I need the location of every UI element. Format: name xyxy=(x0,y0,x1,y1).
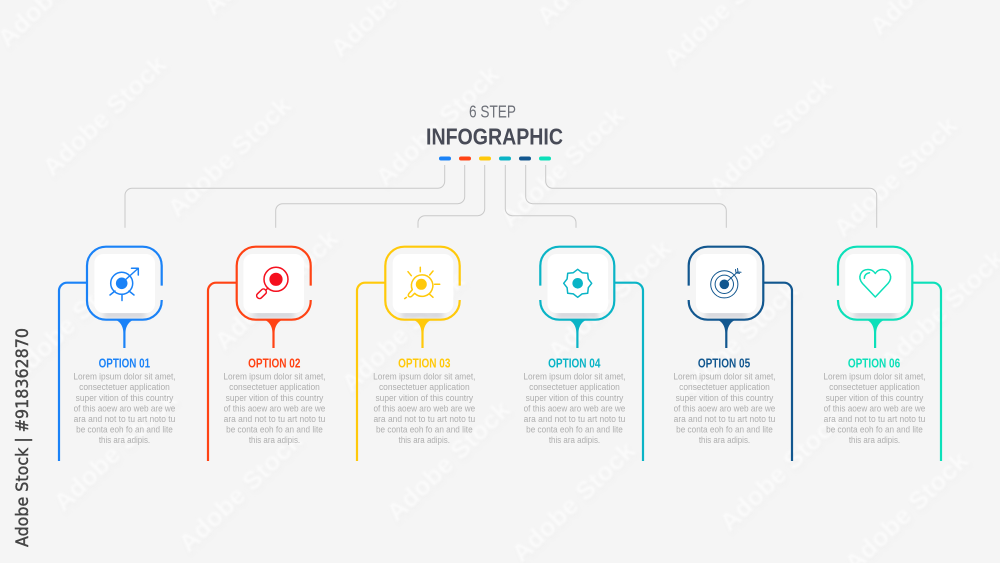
watermark pattern: Adobe Stock xyxy=(338,270,473,401)
watermark pattern: Adobe Stock xyxy=(37,51,172,182)
icon card xyxy=(94,254,155,313)
body text: of this aoew aro web are we xyxy=(373,403,475,413)
stem xyxy=(868,320,883,348)
title: infographic: INFOGRAPHIC xyxy=(426,123,563,149)
body text: be conta eoh fo an and lite xyxy=(226,424,323,434)
body text: consectetuer application xyxy=(229,382,320,392)
option title: OPTION 05 xyxy=(698,355,750,370)
box frame xyxy=(385,247,460,320)
box frame xyxy=(540,247,614,320)
watermark pattern: Adobe Stock xyxy=(3,257,138,388)
body text: ara and not to tu art noto tu xyxy=(224,414,325,424)
card shadow xyxy=(556,312,599,318)
icon: target arrow xyxy=(110,268,138,300)
icon card xyxy=(548,254,608,313)
option title: OPTION 04 xyxy=(548,355,601,370)
stem xyxy=(415,320,430,348)
body text: super vition of this country xyxy=(226,393,324,403)
body text: ara and not to tu art noto tu xyxy=(74,414,175,424)
body text: super vition of this country xyxy=(76,393,174,403)
box frame xyxy=(689,247,763,320)
body text: this ara adipis. xyxy=(849,435,900,445)
body text xyxy=(373,372,475,445)
body text: Lorem ipsum dolor sit amet, xyxy=(673,372,776,382)
panel: option 05 xyxy=(673,247,792,461)
body text: be conta eoh fo an and lite xyxy=(526,424,623,434)
body text: consectetuer application xyxy=(379,382,470,392)
icon card xyxy=(393,254,453,313)
watermark pattern: Adobe Stock xyxy=(714,406,849,537)
stem xyxy=(117,320,132,348)
body text: of this aoew aro web are we xyxy=(524,403,625,413)
title block xyxy=(426,101,563,149)
watermark pattern: Adobe Stock xyxy=(497,105,632,236)
panel: option 03 xyxy=(357,247,475,461)
body text xyxy=(223,372,326,445)
watermark pattern: Adobe Stock xyxy=(173,427,308,558)
watermark pattern: Adobe Stock xyxy=(703,71,838,202)
body text: this ara adipis. xyxy=(99,435,150,445)
box frame xyxy=(87,247,162,320)
body text: of this aoew aro web are we xyxy=(824,403,925,413)
icon: bullseye xyxy=(711,268,741,298)
card shadow xyxy=(401,312,444,318)
box frame xyxy=(237,247,311,320)
body text: consectetuer application xyxy=(79,382,170,392)
watermark pattern: Adobe Stock xyxy=(716,409,851,540)
icon: light bulb xyxy=(405,267,440,299)
watermark pattern: Adobe Stock xyxy=(50,389,185,520)
side line xyxy=(912,283,941,461)
body text: super vition of this country xyxy=(676,393,774,403)
body text: of this aoew aro web are we xyxy=(74,403,175,413)
body text: be conta eoh fo an and lite xyxy=(376,424,473,434)
watermark pattern: Adobe Stock xyxy=(370,61,505,192)
panel: option 06 xyxy=(823,247,941,461)
box frame xyxy=(838,247,912,320)
watermark pattern: Adobe Stock xyxy=(39,54,174,185)
watermark pattern: Adobe Stock xyxy=(381,396,516,527)
panel: option 04 xyxy=(523,247,643,461)
body text: super vition of this country xyxy=(375,393,474,403)
watermark pattern: Adobe Stock xyxy=(383,399,518,530)
connector lines xyxy=(125,165,877,228)
stem xyxy=(719,320,734,348)
body text: ara and not to tu art noto tu xyxy=(674,414,775,424)
watermark pattern: Adobe Stock xyxy=(5,260,140,391)
watermark pattern: Adobe Stock xyxy=(175,430,310,561)
watermark pattern: Adobe Stock xyxy=(211,228,346,359)
body text: of this aoew aro web are we xyxy=(674,403,775,413)
side line xyxy=(614,283,643,461)
body text: Lorem ipsum dolor sit amet, xyxy=(373,372,475,382)
body text: this ara adipis. xyxy=(399,435,450,445)
watermark pattern: Adobe Stock xyxy=(162,92,297,223)
card shadow xyxy=(103,312,146,318)
watermark pattern: Adobe Stock xyxy=(48,386,183,517)
option title: OPTION 06 xyxy=(848,355,900,370)
body text: ara and not to tu art noto tu xyxy=(524,414,625,424)
body text: be conta eoh fo an and lite xyxy=(826,424,923,434)
watermark pattern: Adobe Stock xyxy=(544,238,679,369)
body text: this ara adipis. xyxy=(249,435,300,445)
watermark pattern: Adobe Stock xyxy=(164,95,299,226)
body text: super vition of this country xyxy=(526,393,624,403)
watermark pattern: Adobe Stock xyxy=(336,267,471,398)
watermark pattern: Adobe Stock xyxy=(830,115,965,246)
body text: of this aoew aro web are we xyxy=(224,403,325,413)
body text: this ara adipis. xyxy=(549,435,600,445)
body text: consectetuer application xyxy=(679,382,770,392)
stem xyxy=(570,320,585,348)
body text: be conta eoh fo an and lite xyxy=(676,424,773,434)
side line xyxy=(763,283,792,461)
body text: ara and not to tu art noto tu xyxy=(824,414,925,424)
body text xyxy=(73,372,176,445)
watermark pattern: Adobe Stock xyxy=(705,74,840,205)
body text: this ara adipis. xyxy=(699,435,750,445)
body text xyxy=(523,372,626,445)
icon card xyxy=(696,254,757,313)
body text: be conta eoh fo an and lite xyxy=(76,424,173,434)
body text xyxy=(823,372,926,445)
option title: OPTION 01 xyxy=(99,355,150,370)
title: 6 step: 6 STEP xyxy=(469,101,516,121)
card shadow xyxy=(854,312,896,318)
watermark pattern: Adobe Stock xyxy=(372,64,507,195)
icon card xyxy=(243,254,304,313)
icon card xyxy=(845,254,906,313)
icon: badge gear xyxy=(564,269,592,297)
option title: OPTION 02 xyxy=(248,355,300,370)
body text: ara and not to tu art noto tu xyxy=(373,414,475,424)
side line xyxy=(357,283,385,461)
body text: Lorem ipsum dolor sit amet, xyxy=(823,372,926,382)
body text: Lorem ipsum dolor sit amet, xyxy=(223,372,326,382)
stock credit label: Adobe Stock | #918362870 xyxy=(13,328,33,547)
icon: magnifier xyxy=(256,267,288,300)
icon: heart xyxy=(860,270,891,297)
body text: super vition of this country xyxy=(826,393,924,403)
stem xyxy=(266,320,281,348)
body text: consectetuer application xyxy=(829,382,920,392)
watermark pattern: Adobe Stock xyxy=(828,112,963,243)
body text: Lorem ipsum dolor sit amet, xyxy=(73,372,176,382)
side line xyxy=(59,283,87,461)
body text: Lorem ipsum dolor sit amet, xyxy=(523,372,626,382)
card shadow xyxy=(704,312,748,318)
card shadow xyxy=(252,312,295,318)
panel: option 02 xyxy=(208,247,326,461)
watermark pattern: Adobe Stock xyxy=(209,225,344,356)
watermark pattern: Adobe Stock xyxy=(495,102,630,233)
watermark pattern: Adobe Stock xyxy=(669,277,804,408)
option title: OPTION 03 xyxy=(398,355,450,370)
watermark pattern: Adobe Stock xyxy=(542,235,677,366)
panel: option 01 xyxy=(59,247,176,461)
body text: consectetuer application xyxy=(529,382,620,392)
side line xyxy=(208,283,237,461)
colour dash row xyxy=(439,156,551,160)
body text xyxy=(673,372,776,445)
watermark pattern: Adobe Stock xyxy=(671,280,806,411)
